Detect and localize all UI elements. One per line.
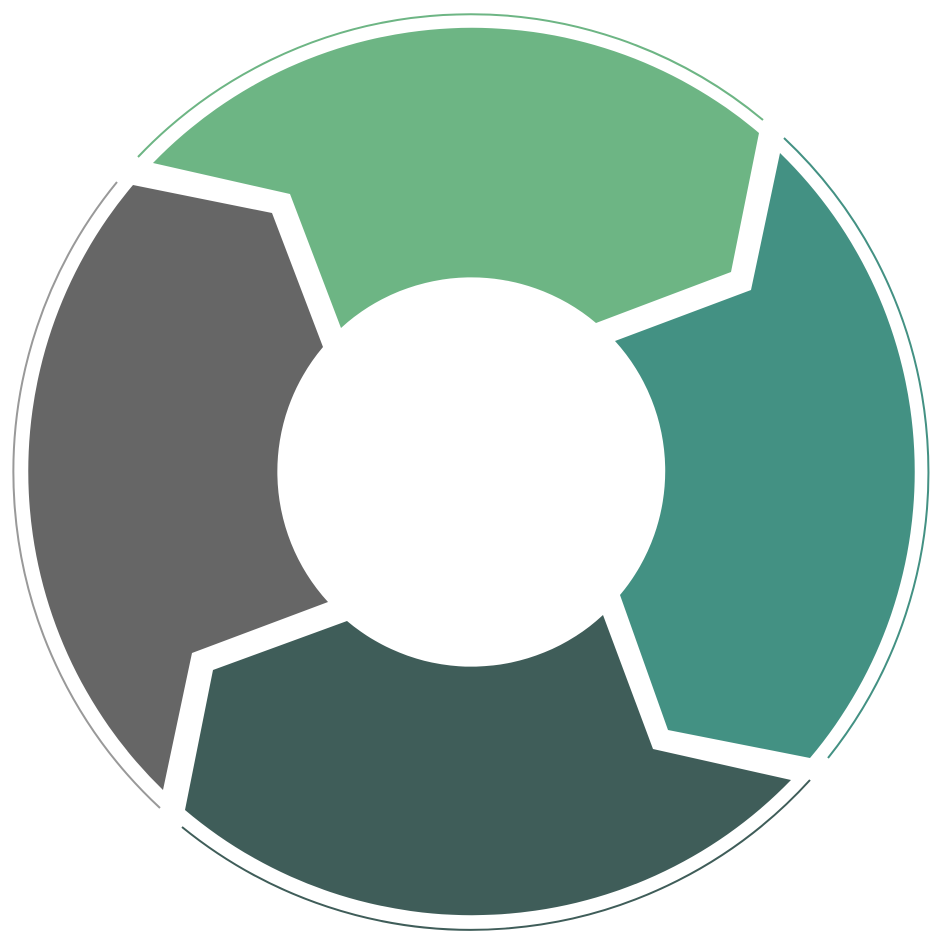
segment: dark green (bottom) — [182, 615, 810, 930]
segment: grey (left) — [13, 182, 328, 808]
segment: green (top) — [138, 14, 763, 328]
segment: teal (right) — [615, 138, 928, 758]
